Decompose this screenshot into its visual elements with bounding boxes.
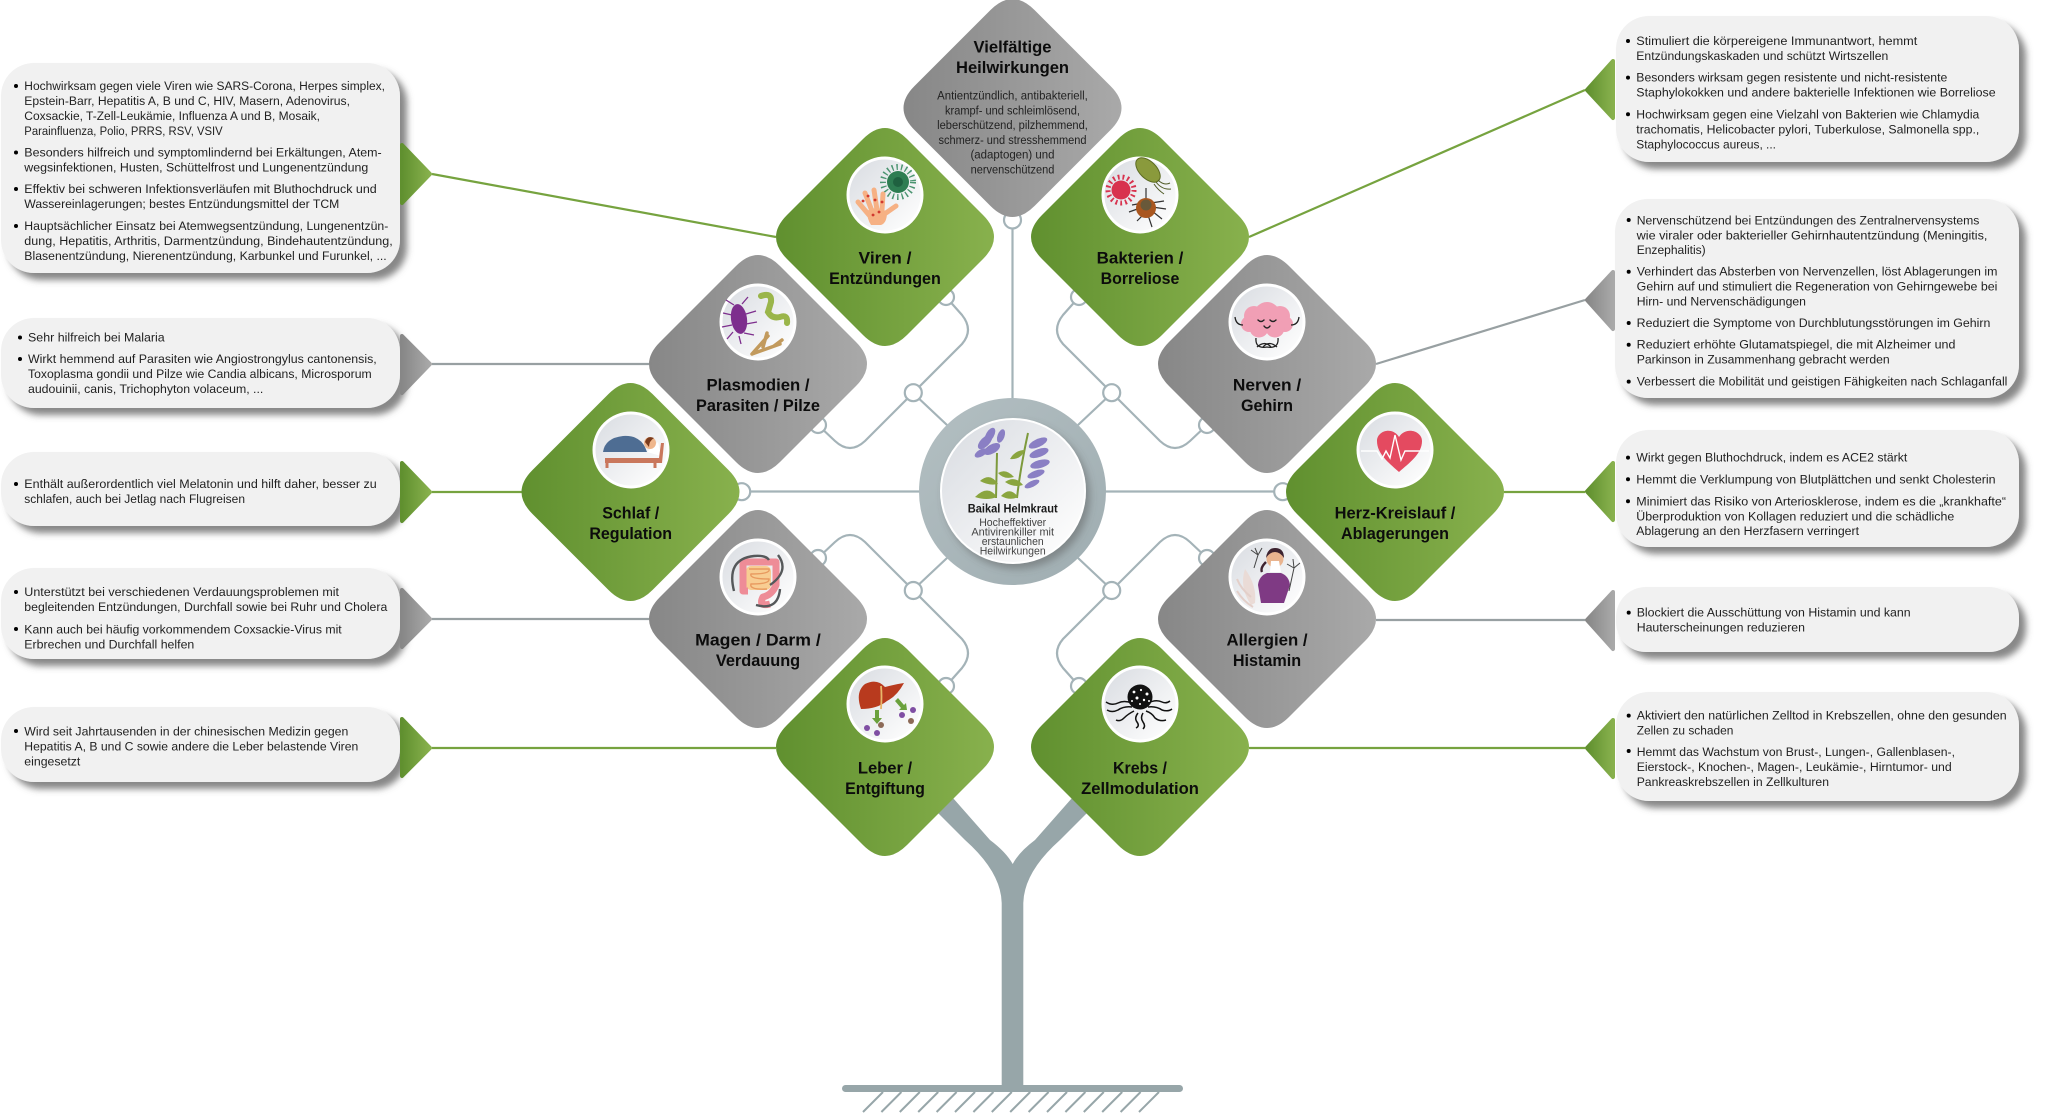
panel: Krebs details xyxy=(1587,692,2019,801)
panel: Viren details: Epstein-Barr, Hepatitis A, B und C, HIV, Masern, Adenovirus, xyxy=(24,94,350,108)
panel: Viren details: Coxsackie, T-Zell-Leukämie, Influenza A und B, Mosaik, xyxy=(24,109,320,123)
icon: woman sneezing xyxy=(1230,540,1304,614)
panel: Nerven details: Verhindert das Absterben von Nervenzellen, löst Ablagerungen im xyxy=(1637,265,1997,279)
diamond: Bakterien / Borreliose: Borreliose xyxy=(1101,269,1179,288)
link lines from diamonds to callouts xyxy=(432,90,1585,748)
panel: Bakterien details: Besonders wirksam gegen resistente und nicht-resistente xyxy=(1636,71,1947,85)
panel: Plasmodien details xyxy=(1,318,430,408)
panel: Bakterien details xyxy=(1587,16,2019,162)
panel: Allergien details: Blockiert die Ausschüttung von Histamin und kann xyxy=(1637,606,1911,620)
panel: Schlaf details: schlafen, auch bei Jetlag nach Flugreisen xyxy=(24,492,245,506)
arrow: green pointer xyxy=(402,145,430,203)
panel: Viren details: Besonders hilfreich und symptomlindernd bei Erkältungen, Atem- xyxy=(24,146,382,160)
diamond: Viren / Entzündungen: Viren / xyxy=(858,248,912,267)
panel: Magen details xyxy=(1,568,430,659)
panel: Plasmodien details: Toxoplasma gondii und Pilze wie Candia albicans, Microsporum xyxy=(28,367,372,381)
panel: Nerven details: Nervenschützend bei Entzündungen des Zentralnervensystems xyxy=(1637,213,1979,227)
diamond: Magen / Darm / Verdauung xyxy=(649,510,867,728)
panel: Schlaf details: Enthält außerordentlich viel Melatonin und hilft daher, besser zu xyxy=(24,477,377,491)
panel: Viren details: Blasenentzündung, Nierenentzündung, Karbunkel und Furunkel, ... xyxy=(24,249,387,263)
panel: Plasmodien details: Wirkt hemmend auf Parasiten wie Angiostrongylus cantonensis, xyxy=(28,352,377,366)
icon: virus and hand xyxy=(848,158,922,232)
panel: Nerven details: Verbessert die Mobilität und geistigen Fähigkeiten nach Schlaganfall xyxy=(1637,375,2007,389)
center circle: Baikal Helmkraut: erstaunlichen xyxy=(982,536,1044,548)
diamond: Leber / Entgiftung xyxy=(776,638,994,856)
diamond: Magen / Darm / Verdauung: Magen / Darm / xyxy=(695,630,821,649)
panel: Krebs details: Pankreaskrebszellen in Zellkulturen xyxy=(1637,775,1829,789)
panel: Bakterien details: Hochwirksam gegen eine Vielzahl von Bakterien wie Chlamydia xyxy=(1636,107,1979,121)
panel: Magen details: Unterstützt bei verschiedenen Verdauungsproblemen mit xyxy=(24,585,340,599)
panel: Magen details: Kann auch bei häufig vorkommendem Coxsackie-Virus mit xyxy=(24,622,342,636)
arrow: green pointer xyxy=(1587,720,1613,777)
diamond: Plasmodien / Parasiten / Pilze xyxy=(649,255,867,473)
panel: Viren details: dung, Hepatitis, Arthritis, Darmentzündung, Bindehautentzündung, xyxy=(24,234,393,248)
center circle: Baikal Helmkraut: Heilwirkungen xyxy=(980,546,1046,558)
panel: Magen details: Erbrechen und Durchfall helfen xyxy=(24,637,194,651)
panel: Viren details: Parainfluenza, Polio, PRRS, RSV, VSIV xyxy=(24,124,223,138)
panel: Allergien details xyxy=(1587,587,2019,652)
panel: Nerven details: Gehirn auf und stimuliert die Regeneration von Gehirngewebe bei xyxy=(1637,280,1997,294)
panel: Herz details: Wirkt gegen Bluthochdruck, indem es ACE2 stärkt xyxy=(1636,451,1908,465)
diamond: Vielfältige Heilwirkungen: Heilwirkungen xyxy=(956,58,1069,77)
connector network xyxy=(733,212,1291,694)
panel: Schlaf details xyxy=(1,452,430,526)
diamond: Nerven / Gehirn xyxy=(1158,255,1376,473)
arrow: green pointer xyxy=(1587,61,1613,118)
panel: Krebs details: Zellen zu schaden xyxy=(1637,724,1734,738)
panel: Leber details: Wird seit Jahrtausenden in der chinesischen Medizin gegen xyxy=(24,724,348,738)
diamond: Plasmodien / Parasiten / Pilze: Plasmodien / xyxy=(706,375,810,394)
diamond: Leber / Entgiftung: Leber / xyxy=(858,758,912,777)
icon: parasites xyxy=(721,285,795,359)
diamond: Plasmodien / Parasiten / Pilze: Parasiten / Pilze xyxy=(696,396,820,415)
panel: Leber details: eingesetzt xyxy=(24,754,81,768)
panel: Herz details: Überproduktion von Kollagen reduziert und die schädliche xyxy=(1636,509,1954,523)
diamond: Schlaf / Regulation: Regulation xyxy=(589,524,672,543)
diamond: Leber / Entgiftung: Entgiftung xyxy=(845,779,925,798)
panel: Nerven details: Reduziert erhöhte Glutamatspiegel, die mit Alzheimer und xyxy=(1637,338,1956,352)
center circle: Baikal Helmkraut: Hocheffektiver xyxy=(979,517,1047,529)
panel: Viren details: wegsinfektionen, Husten, Schüttelfrost und Lungenentzündung xyxy=(23,160,368,174)
arrow: green pointer xyxy=(402,463,430,521)
panel: Krebs details: Eierstock-, Knochen-, Magen-, Leukämie-, Hirntumor- und xyxy=(1637,760,1952,774)
arrow: gray pointer xyxy=(1587,592,1613,649)
diamond: Bakterien / Borreliose xyxy=(1031,128,1249,346)
diamond: Schlaf / Regulation: Schlaf / xyxy=(602,503,660,522)
diamond: Nerven / Gehirn: Nerven / xyxy=(1233,375,1301,394)
panel: Herz details: Minimiert das Risiko von Arteriosklerose, indem es die „krankhafte“ xyxy=(1636,494,2006,508)
panel: Nerven details xyxy=(1587,199,2019,398)
panel: Bakterien details: Stimuliert die körpereigene Immunantwort, hemmt xyxy=(1636,34,1918,48)
panel: Bakterien details: trachomatis, Helicobacter pylori, Tuberkulose, Salmonella spp., xyxy=(1636,122,1979,136)
arrow: gray pointer xyxy=(402,590,430,647)
diamond: Vielfältige Heilwirkungen xyxy=(904,0,1122,217)
diamond: Krebs / Zellmodulation: Krebs / xyxy=(1113,758,1167,777)
diamond: Krebs / Zellmodulation: Zellmodulation xyxy=(1081,779,1199,798)
diamond: Allergien / Histamin xyxy=(1158,510,1376,728)
diamond: Bakterien / Borreliose: Bakterien / xyxy=(1097,248,1184,267)
panel: Krebs details: Hemmt das Wachstum von Brust-, Lungen-, Gallenblasen-, xyxy=(1637,745,1955,759)
diamond: Vielfältige Heilwirkungen: schmerz- und stresshemmend xyxy=(938,133,1086,147)
icon: cancer cell xyxy=(1103,667,1177,741)
panel: Bakterien details: Entzündungskaskaden und schützt Wirtszellen xyxy=(1636,49,1888,63)
diamond: Vielfältige Heilwirkungen: (adaptogen) und xyxy=(970,148,1054,162)
ground bar with hatching xyxy=(842,1085,1183,1112)
panel: Nerven details: Enzephalitis) xyxy=(1637,243,1706,257)
diamond: Viren / Entzündungen xyxy=(776,128,994,346)
panel: Allergien details: Hauterscheinungen reduzieren xyxy=(1637,621,1805,635)
panel: Herz details: Ablagerung an den Herzfasern verringert xyxy=(1636,524,1860,538)
panel: Nerven details: Hirn- und Nervenschädigungen xyxy=(1637,295,1806,309)
diamond: Viren / Entzündungen: Entzündungen xyxy=(829,269,941,288)
panel: Bakterien details: Staphylokokken und andere bakterielle Infektionen wie Borreliose xyxy=(1636,86,1996,100)
panel: Viren details: Hochwirksam gegen viele Viren wie SARS-Corona, Herpes simplex, xyxy=(24,79,385,93)
center circle: Baikal Helmkraut: Antivirenkiller mit xyxy=(971,526,1054,538)
icon: bacteria and tick xyxy=(1103,153,1177,232)
panel: Plasmodien details: Sehr hilfreich bei Malaria xyxy=(28,330,165,344)
arrow: gray pointer xyxy=(402,336,430,393)
panel: Nerven details: wie viraler oder bakterieller Gehirnhautentzündung (Meningitis, xyxy=(1636,228,1987,242)
panel: Krebs details: Aktiviert den natürlichen Zelltod in Krebszellen, ohne den gesunden xyxy=(1637,709,2007,723)
panel: Viren details: Wassereinlagerungen; bestes Entzündungsmittel der TCM xyxy=(24,197,339,211)
center circle: Baikal Helmkraut xyxy=(919,398,1106,585)
icon: skullcap plant xyxy=(973,426,1051,499)
diamond: Vielfältige Heilwirkungen: leberschützend, pilzhemmend, xyxy=(937,118,1088,132)
diamond: Vielfältige Heilwirkungen: Antientzündlich, antibakteriell, xyxy=(937,88,1088,102)
diamond: Herz-Kreislauf / Ablagerungen xyxy=(1286,383,1504,601)
diamond: Herz-Kreislauf / Ablagerungen: Ablagerungen xyxy=(1341,524,1449,543)
diamond: Vielfältige Heilwirkungen: krampf- und schleimlösend, xyxy=(945,103,1080,117)
panel: Viren details: Hauptsächlicher Einsatz bei Atemwegsentzündung, Lungenentzün- xyxy=(24,219,388,233)
diamond: Allergien / Histamin: Histamin xyxy=(1233,651,1301,670)
panel: Magen details: begleitenden Entzündungen, Durchfall sowie bei Ruhr und Cholera xyxy=(24,600,387,614)
panel: Nerven details: Parkinson in Zusammenhang gebracht werden xyxy=(1637,353,1890,367)
diamond: Schlaf / Regulation xyxy=(522,383,740,601)
panel: Herz details xyxy=(1587,430,2019,547)
arrow: gray pointer xyxy=(1587,272,1613,329)
panel: Leber details: Hepatitis A, B und C sowie andere die Leber belastende Viren xyxy=(24,739,358,753)
arrow: green pointer xyxy=(402,719,430,776)
panel: Plasmodien details: audouinii, canis, Trichophyton volaceum, ... xyxy=(28,382,263,396)
icon: intestines xyxy=(721,540,795,614)
icon: heart with ECG line xyxy=(1358,413,1432,487)
icon: meditating brain xyxy=(1230,285,1304,359)
icon: person sleeping in bed xyxy=(594,413,668,487)
diamond: Vielfältige Heilwirkungen: Vielfältige xyxy=(974,38,1052,57)
icon: liver with toxins xyxy=(848,667,922,741)
panel: Leber details xyxy=(1,707,430,782)
panel: Herz details: Hemmt die Verklumpung von Blutplättchen und senkt Cholesterin xyxy=(1636,472,1996,486)
panel: Bakterien details: Staphylococcus aureus, ... xyxy=(1636,137,1776,151)
diamond: Nerven / Gehirn: Gehirn xyxy=(1241,396,1293,415)
panel: Viren details xyxy=(1,63,430,273)
arrow: green pointer xyxy=(1587,463,1613,520)
panel: Viren details: Effektiv bei schweren Infektionsverläufen mit Bluthochdruck und xyxy=(24,182,377,196)
tree trunk and branches xyxy=(936,798,1089,1088)
panel: Nerven details: Reduziert die Symptome von Durchblutungsstörungen im Gehirn xyxy=(1637,316,1991,330)
center circle: Baikal Helmkraut: Baikal Helmkraut xyxy=(968,502,1058,516)
diamond: Magen / Darm / Verdauung: Verdauung xyxy=(716,651,800,670)
diamond: Krebs / Zellmodulation xyxy=(1031,638,1249,856)
diamond: Allergien / Histamin: Allergien / xyxy=(1226,630,1308,649)
diamond: Herz-Kreislauf / Ablagerungen: Herz-Kreislauf / xyxy=(1335,503,1456,522)
diamond: Vielfältige Heilwirkungen: nervenschützend xyxy=(971,162,1054,176)
